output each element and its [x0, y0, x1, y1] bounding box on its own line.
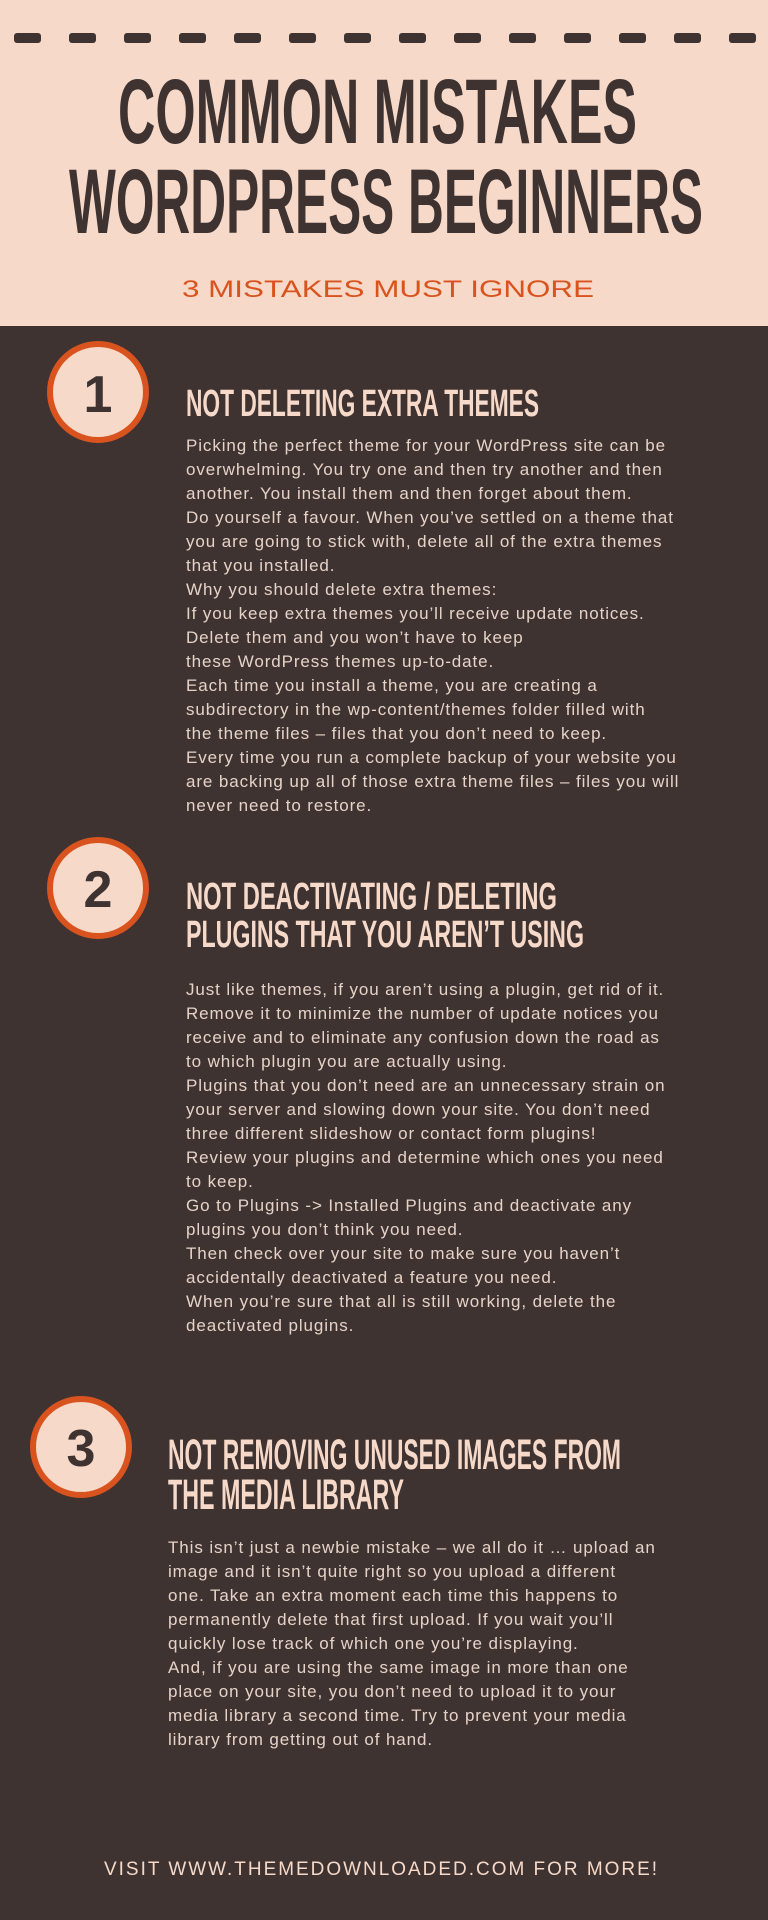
section 2 [50, 840, 665, 1335]
body 1: another. You install them and then forget about them. [186, 484, 633, 503]
body 2: three different slideshow or contact form plugins! [186, 1124, 596, 1143]
body 1: these WordPress themes up-to-date. [186, 652, 494, 671]
body 1: Delete them and you won’t have to keep [186, 628, 524, 647]
body 2: Just like themes, if you aren’t using a plugin, get rid of it. [186, 980, 664, 999]
body 2: Then check over your site to make sure you haven’t [186, 1244, 620, 1263]
body 2: receive and to eliminate any confusion down the road as [186, 1028, 660, 1047]
section 3 [33, 1399, 656, 1749]
body 3: library from getting out of hand. [168, 1730, 433, 1749]
body 2: plugins you don’t think you need. [186, 1220, 463, 1239]
icon: number 3 circle: 3 [67, 1420, 95, 1478]
icon: number 3 circle [33, 1399, 129, 1495]
body 3: one. Take an extra moment each time this happens to [168, 1586, 618, 1605]
body 3: permanently delete that first upload. If you wait you’ll [168, 1610, 613, 1629]
body 2: Remove it to minimize the number of update notices you [186, 1004, 659, 1023]
body 1: subdirectory in the wp-content/themes folder filled with [186, 700, 646, 719]
body 2: deactivated plugins. [186, 1316, 354, 1335]
heading 2 [186, 876, 584, 956]
heading 1: NOT DELETING EXTRA THEMES [186, 383, 539, 425]
heading 3 [168, 1431, 621, 1519]
icon: number 1 circle [50, 344, 146, 440]
body 3 [168, 1538, 656, 1749]
body 1: are backing up all of those extra theme files – files you will [186, 772, 679, 791]
body 1: If you keep extra themes you’ll receive update notices. [186, 604, 645, 623]
body 1: you are going to stick with, delete all of the extra themes [186, 532, 662, 551]
body 2 [186, 980, 665, 1335]
body 1: that you installed. [186, 556, 335, 575]
body 3: image and it isn’t quite right so you upload a different [168, 1562, 616, 1581]
body 1: Do yourself a favour. When you’ve settled on a theme that [186, 508, 674, 527]
title [69, 61, 703, 253]
section 1 [50, 344, 679, 815]
header panel [0, 0, 768, 326]
icon: number 2 circle: 2 [84, 861, 112, 919]
body 1: never need to restore. [186, 796, 372, 815]
body 1: Each time you install a theme, you are creating a [186, 676, 598, 695]
body 1: Why you should delete extra themes: [186, 580, 497, 599]
body 2: Go to Plugins -> Installed Plugins and deactivate any [186, 1196, 632, 1215]
body 2: Plugins that you don’t need are an unnecessary strain on [186, 1076, 665, 1095]
icon: number 2 circle [50, 840, 146, 936]
footer: VISIT WWW.THEMEDOWNLOADED.COM FOR MORE! [104, 1859, 659, 1880]
heading 2: NOT DEACTIVATING / DELETING [186, 876, 557, 918]
body 1 [186, 436, 679, 815]
body 1: the theme files – files that you don’t need to keep. [186, 724, 607, 743]
body 1: Every time you run a complete backup of your website you [186, 748, 677, 767]
body 3: quickly lose track of which one you’re displaying. [168, 1634, 579, 1653]
body 3: place on your site, you don’t need to upload it to your [168, 1682, 616, 1701]
body 2: your server and slowing down your site. You don’t need [186, 1100, 650, 1119]
body 2: to keep. [186, 1172, 254, 1191]
icon: number 1 circle: 1 [84, 366, 112, 424]
subtitle: 3 MISTAKES MUST IGNORE [182, 276, 594, 303]
body 2: to which plugin you are actually using. [186, 1052, 507, 1071]
body 2: Review your plugins and determine which ones you need [186, 1148, 664, 1167]
body 3: media library a second time. Try to prevent your media [168, 1706, 627, 1725]
body 1: overwhelming. You try one and then try another and then [186, 460, 663, 479]
body 3: This isn’t just a newbie mistake – we all do it … upload an [168, 1538, 656, 1557]
body 3: And, if you are using the same image in more than one [168, 1658, 629, 1677]
body 2: When you’re sure that all is still working, delete the [186, 1292, 616, 1311]
body 1: Picking the perfect theme for your WordPress site can be [186, 436, 666, 455]
body 2: accidentally deactivated a feature you need. [186, 1268, 557, 1287]
heading 3: THE MEDIA LIBRARY [168, 1471, 404, 1519]
